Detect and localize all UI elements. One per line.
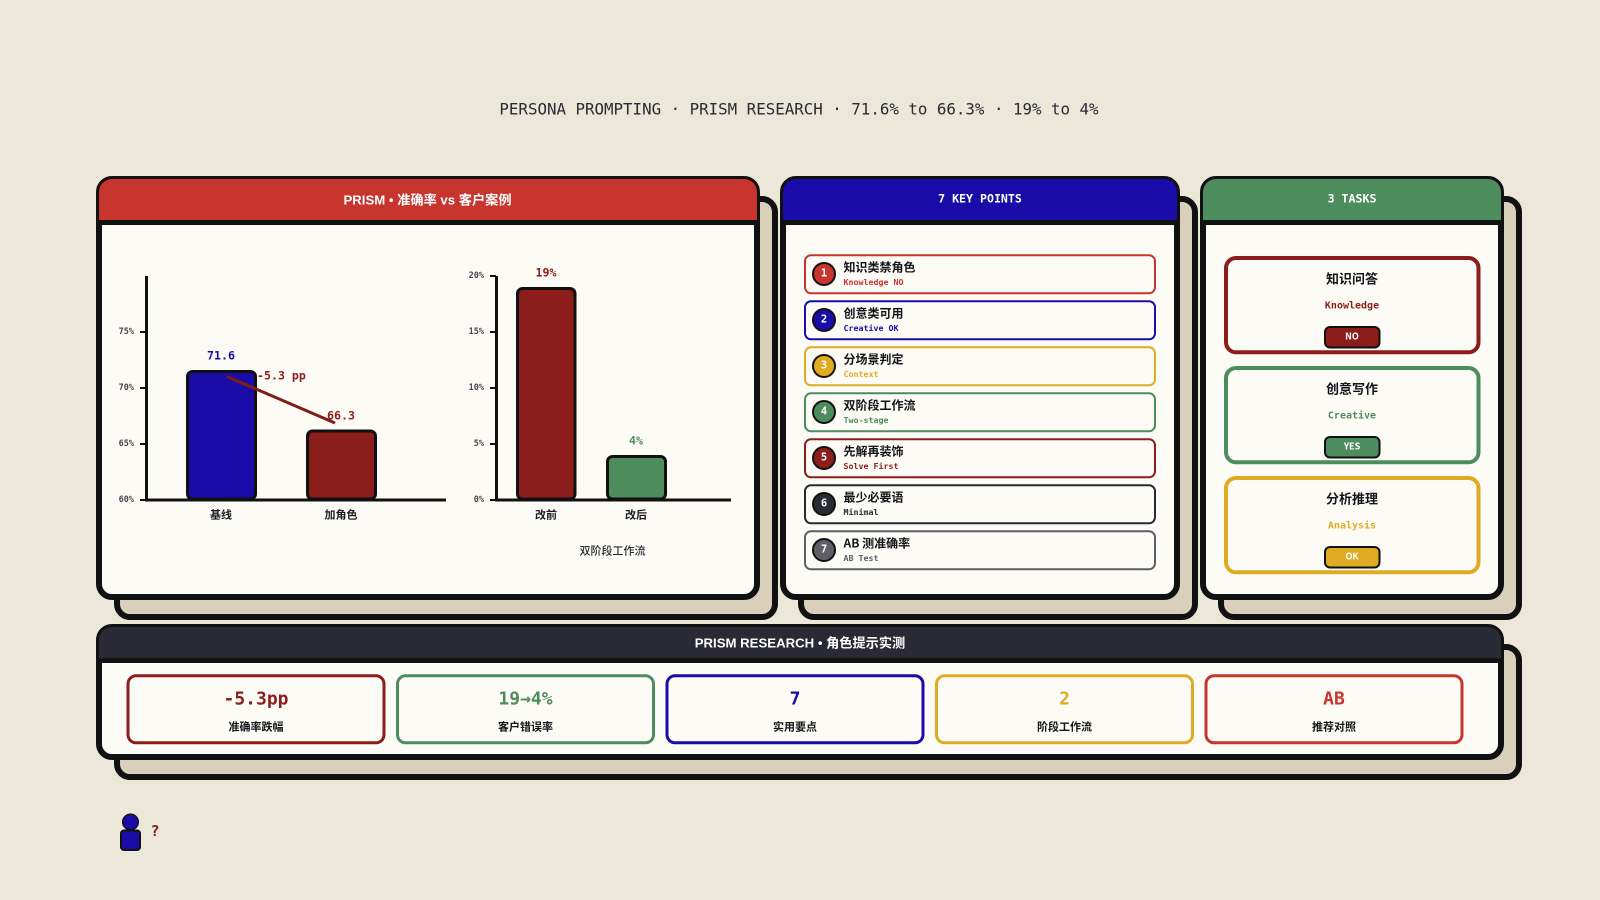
stat card: workflow stages: 阶段工作流 (1037, 718, 1092, 734)
task card: creative: 创意写作 (1326, 378, 1378, 398)
bar chart: accuracy: 70% (119, 383, 135, 393)
key point 3: 分场景判定 (844, 350, 904, 368)
key point 5: 先解再装饰 (844, 442, 904, 460)
key point 6: 最少必要语 (844, 488, 904, 506)
panel header: 7 key points: 7 KEY POINTS (938, 192, 1022, 206)
panel header: 3 tasks (1203, 179, 1501, 225)
task card: knowledge: 知识问答 (1326, 268, 1378, 288)
key point 4: 4 (821, 406, 827, 418)
key point 1: 1 (821, 268, 827, 280)
panel header: prism research (99, 627, 1501, 663)
stat card: recommended comparison: 推荐对照 (1312, 718, 1356, 734)
bar chart: customer error rate: 19% (536, 266, 556, 280)
bar chart: accuracy: 65% (119, 439, 135, 449)
bar chart: customer error rate: 双阶段工作流 (580, 542, 646, 558)
bar chart: customer error rate: 改前 (535, 506, 557, 522)
bar chart: customer error rate: 0% (474, 495, 485, 505)
bar chart: accuracy: 66.3 (327, 408, 355, 422)
task card: creative: YES (1343, 440, 1361, 452)
task card: analysis: Analysis (1328, 520, 1376, 532)
panel: accuracy charts (99, 179, 775, 617)
icon: person with question mark (121, 814, 160, 850)
panel header: prism research: PRISM RESEARCH • 角色提示实测 (695, 634, 905, 650)
key point 6: 6 (821, 498, 827, 510)
stat card: accuracy drop (128, 676, 384, 743)
key point 5: 5 (821, 452, 827, 464)
stat card: practical points: 实用要点 (773, 718, 817, 734)
panel header: 3 tasks: 3 TASKS (1328, 192, 1376, 206)
key point 5: Solve First (844, 461, 898, 471)
key point 2: 创意类可用 (844, 304, 904, 322)
key point 7: AB Test (844, 553, 878, 563)
bar chart: customer error rate: 5% (474, 439, 485, 449)
key point 6: Minimal (844, 507, 878, 517)
stat card: customer error rate: 19→4% (498, 688, 553, 710)
task card: knowledge: NO (1345, 330, 1359, 342)
panel: 3 tasks (1203, 179, 1519, 617)
key point 1: Knowledge NO (844, 277, 903, 287)
key point 7: 7 (821, 544, 827, 556)
stat card: practical points: 7 (790, 688, 800, 710)
key point 2: Creative OK (844, 323, 898, 333)
bar chart: customer error rate: 4% (629, 434, 643, 448)
panel header: accuracy charts: PRISM • 准确率 vs 客户案例 (343, 192, 512, 208)
bar chart: customer error rate (469, 266, 731, 558)
stat card: recommended comparison (1206, 676, 1462, 743)
bar chart: customer error rate: 改后 (625, 506, 647, 522)
key point 4 (805, 393, 1155, 431)
key point 7: AB 测准确率 (842, 534, 910, 552)
key point 4: Two-stage (844, 415, 888, 425)
key point 2: 2 (821, 314, 827, 326)
bar chart: accuracy (119, 276, 446, 522)
stat card: accuracy drop: -5.3pp (223, 688, 289, 710)
panel: prism research summary (99, 627, 1519, 777)
bar chart: accuracy: 60% (119, 495, 135, 505)
key point 3: 3 (821, 360, 827, 372)
bar chart: accuracy: 加角色 (324, 506, 358, 522)
task card: creative (1226, 368, 1478, 462)
key point 5 (805, 439, 1155, 477)
stat card: workflow stages (936, 676, 1192, 743)
stat card: accuracy drop: 准确率跌幅 (228, 718, 284, 734)
key point 7 (805, 531, 1155, 569)
key point 1 (805, 255, 1155, 293)
key point 4: 双阶段工作流 (844, 396, 916, 414)
key point 6 (805, 485, 1155, 523)
bar chart: accuracy: -5.3 pp (257, 368, 306, 382)
task card: creative: Creative (1328, 410, 1376, 422)
key point 2 (805, 301, 1155, 339)
bar chart: customer error rate: 15% (469, 327, 485, 337)
bar chart: customer error rate: 20% (469, 271, 485, 281)
task card: knowledge: Knowledge (1325, 300, 1379, 312)
stat card: workflow stages: 2 (1059, 688, 1070, 710)
bar chart: accuracy: 71.6 (207, 348, 235, 362)
key point 3: Context (844, 369, 878, 379)
task card: analysis (1226, 478, 1478, 572)
task card: analysis: OK (1345, 550, 1359, 562)
key point 3 (805, 347, 1155, 385)
bar chart: accuracy: 基线 (210, 506, 232, 522)
key point 1: 知识类禁角色 (844, 258, 916, 276)
stat card: customer error rate (398, 676, 654, 743)
bar chart: customer error rate: 10% (469, 383, 485, 393)
icon: person with question mark: ? (150, 822, 160, 840)
panel: 7 key points (783, 179, 1195, 617)
stat card: customer error rate: 客户错误率 (498, 718, 553, 734)
panel header: accuracy charts (99, 179, 757, 225)
stat card: recommended comparison: AB (1323, 688, 1345, 710)
bar chart: accuracy: 75% (119, 327, 135, 337)
title: PERSONA PROMPTING · PRISM RESEARCH · 71.6% to 66.3% · 19% to 4% (499, 100, 1099, 118)
panel header: 7 key points (783, 179, 1177, 225)
stat card: practical points (667, 676, 923, 743)
task card: knowledge (1226, 258, 1478, 352)
task card: analysis: 分析推理 (1326, 488, 1378, 508)
